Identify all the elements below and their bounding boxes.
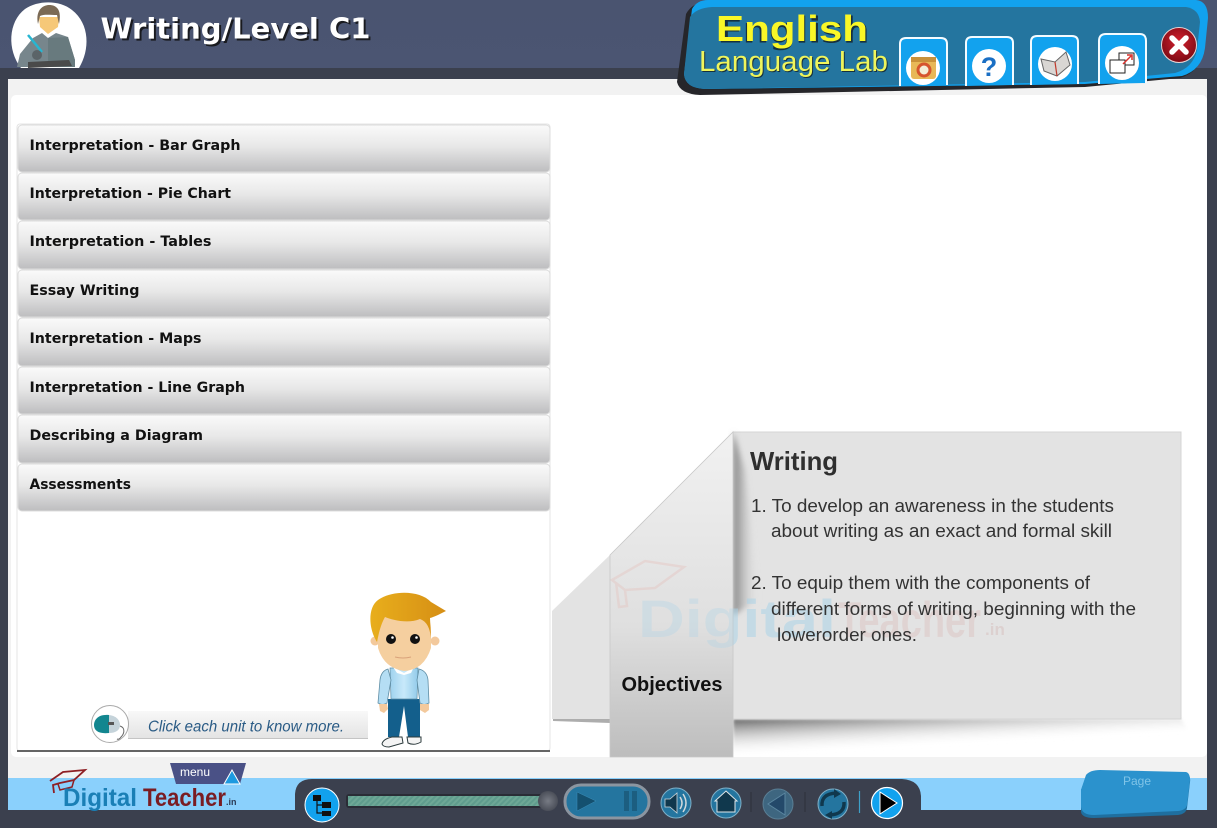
watermark overlay: [612, 561, 836, 649]
menu item: Assessments: Assessments: [30, 477, 131, 493]
icon: help tab: ?: [981, 52, 997, 82]
back fold: [552, 555, 610, 719]
icon: contents tree: [305, 788, 339, 822]
panel: objectives fold: [552, 432, 1200, 758]
objectives list: 2. To equip them with the components of: [751, 573, 1091, 594]
menu item: Interpretation - Pie Chart: Interpretation - Pie Chart: [30, 186, 231, 202]
objectives list: about writing as an exact and formal skill: [771, 521, 1112, 542]
menu tab: [170, 763, 246, 784]
logo: Digital Teacher: [50, 770, 236, 812]
icon: next: [872, 788, 902, 818]
icon: reload: [818, 789, 848, 819]
icon: volume: [661, 788, 691, 818]
menu item: Interpretation - Maps: [18, 318, 550, 366]
title: Writing/Level C1: [100, 12, 370, 46]
menu item: Essay Writing: Essay Writing: [30, 283, 140, 299]
menu item: Interpretation - Line Graph: Interpretation - Line Graph: [30, 380, 245, 396]
menu item: Describing a Diagram: [18, 415, 550, 463]
icon: history folder tab: [900, 38, 947, 86]
watermark overlay: Digital: [638, 590, 836, 649]
heading: Language Lab: Language Lab: [700, 47, 889, 79]
menu item: Interpretation - Line Graph: [18, 367, 550, 414]
label: Objectives: Objectives: [622, 674, 722, 696]
panel: English Language Lab toolbar: [677, 0, 1208, 95]
objectives card: [733, 432, 1181, 719]
heading: Language Lab: Language Lab: [699, 46, 888, 78]
icon: home: [711, 788, 741, 818]
menu item: Interpretation - Maps: Interpretation - Maps: [30, 331, 202, 347]
callout: click hint: [92, 706, 368, 742]
watermark: Digital Teacher: .in: [985, 620, 1005, 639]
watermark: Digital Teacher: Digital: [638, 590, 836, 649]
heading: Writing: Writing: [750, 446, 838, 476]
menu tab: menu: [180, 765, 210, 779]
illustration: boy character: [370, 593, 446, 747]
icon: student writing avatar: [11, 2, 87, 68]
menu item: Interpretation - Pie Chart: [18, 173, 550, 220]
menu item: Essay Writing: [18, 270, 550, 317]
page indicator: [1081, 770, 1190, 818]
icon: help tab: [966, 37, 1013, 86]
menu item: Describing a Diagram: Describing a Diagram: [30, 428, 203, 444]
callout: click hint: Click each unit to know more.: [148, 718, 344, 736]
progress bar: [346, 791, 558, 811]
front fold: [610, 432, 733, 757]
panel: playback controls: [295, 779, 921, 822]
menu item: Interpretation - Bar Graph: [18, 125, 550, 172]
panel: unit menu: [17, 124, 550, 752]
menu item: Interpretation - Tables: Interpretation - Tables: [30, 234, 212, 250]
objectives list: 1. To develop an awareness in the students: [751, 496, 1114, 517]
objectives list: lowerorder ones.: [777, 625, 917, 646]
icon: previous: [763, 789, 793, 819]
logo: Digital Teacher: Teacher: [143, 784, 226, 812]
page indicator: Page: [1123, 774, 1151, 788]
watermark: Digital Teacher: [612, 561, 1005, 649]
objectives list: [751, 496, 1136, 646]
objectives list: different forms of writing, beginning with the: [771, 599, 1136, 620]
menu item: Assessments: [18, 464, 550, 511]
heading: English: English: [718, 10, 870, 52]
watermark: Digital Teacher: Teacher: [838, 592, 981, 648]
title: Writing/Level C1: [102, 14, 372, 48]
logo: Digital Teacher: Digital: [63, 784, 137, 812]
menu item: Interpretation - Bar Graph: Interpretation - Bar Graph: [30, 138, 240, 154]
fold shadow: [733, 432, 758, 615]
heading: English: English: [716, 8, 868, 49]
play pause control: [565, 785, 649, 818]
icon: window tab: [1099, 34, 1146, 84]
menu item: Interpretation - Tables: [18, 221, 550, 269]
icon: book tab: [1031, 36, 1078, 85]
back fold shadow: [553, 717, 610, 723]
logo: Digital Teacher: .in: [226, 797, 236, 807]
icon: close button: [1162, 28, 1196, 62]
drop shadow under card: [733, 719, 1200, 758]
